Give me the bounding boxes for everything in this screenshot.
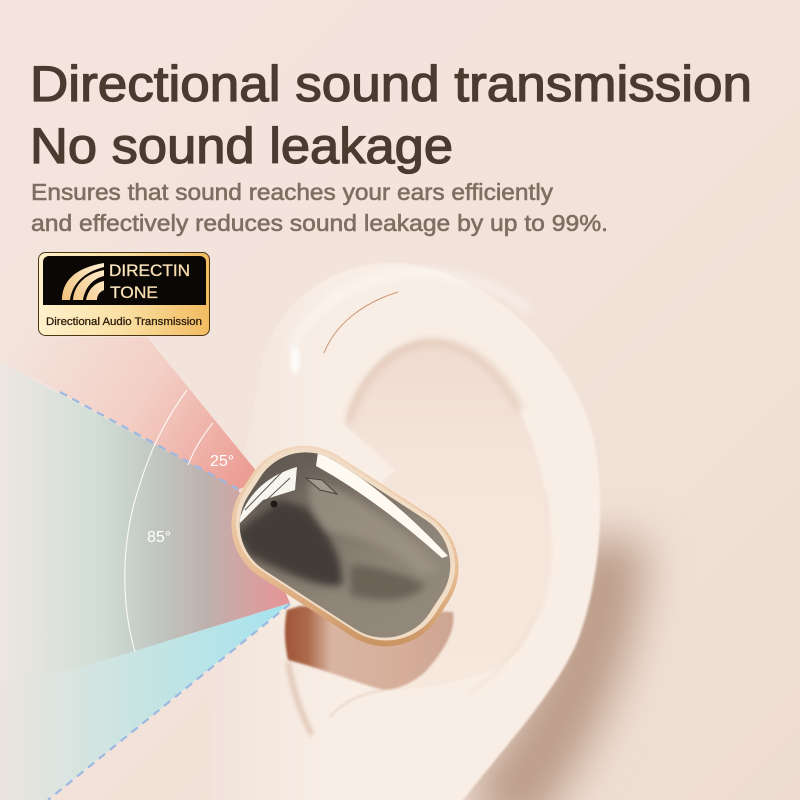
hook gloss (290, 272, 530, 350)
crease (288, 662, 312, 735)
concha (300, 340, 549, 690)
title: Directional sound transmission (30, 56, 752, 112)
badge caption: Directional Audio Transmission (46, 316, 202, 328)
sensor dot (270, 500, 278, 508)
white highlight left (238, 467, 297, 525)
illustration: earbud (232, 446, 459, 646)
dashed cone edges (48, 392, 290, 800)
badge black panel (43, 256, 206, 305)
label: 85 degrees: 85° (147, 529, 171, 546)
helix seam (324, 292, 398, 353)
badge logo text: TONE (110, 284, 158, 302)
label: 25 degrees: 25° (210, 453, 234, 470)
shadow behind ear (495, 540, 608, 800)
blue lower cone (0, 603, 290, 800)
dark reflection (235, 500, 342, 586)
pink narrow cone (5, 337, 262, 490)
highlight lines (245, 472, 290, 510)
ear canal cavity (285, 606, 453, 690)
badge body (38, 252, 210, 336)
helix ridge (470, 490, 550, 692)
panel: sound cones (0, 337, 290, 800)
white highlight top (316, 452, 448, 558)
angle arcs (125, 390, 213, 652)
lobe ridge (330, 690, 385, 717)
ear silhouette (210, 263, 600, 800)
lower reflection (350, 565, 425, 600)
bud mirror face (240, 452, 450, 638)
subtitle (31, 179, 608, 236)
illustration: ear (210, 263, 600, 800)
badge: Directin Tone (38, 252, 210, 336)
title: No sound leakage (30, 118, 453, 174)
reflected diamond (306, 478, 337, 494)
badge logo text: DIRECTIN (109, 262, 190, 280)
subtitle: and effectively reduces sound leakage by up to 99%. (31, 210, 608, 236)
title (30, 56, 752, 174)
bud cream edge (214, 426, 477, 663)
concha top shadow (349, 342, 520, 422)
bud rim (208, 422, 482, 670)
badge logo arcs (62, 263, 104, 300)
wide gradient cone (0, 362, 290, 682)
subtitle: Ensures that sound reaches your ears efficiently (31, 179, 553, 205)
light grey sweep (309, 480, 440, 575)
hook highlight (290, 346, 300, 374)
badge logo text (109, 262, 190, 302)
